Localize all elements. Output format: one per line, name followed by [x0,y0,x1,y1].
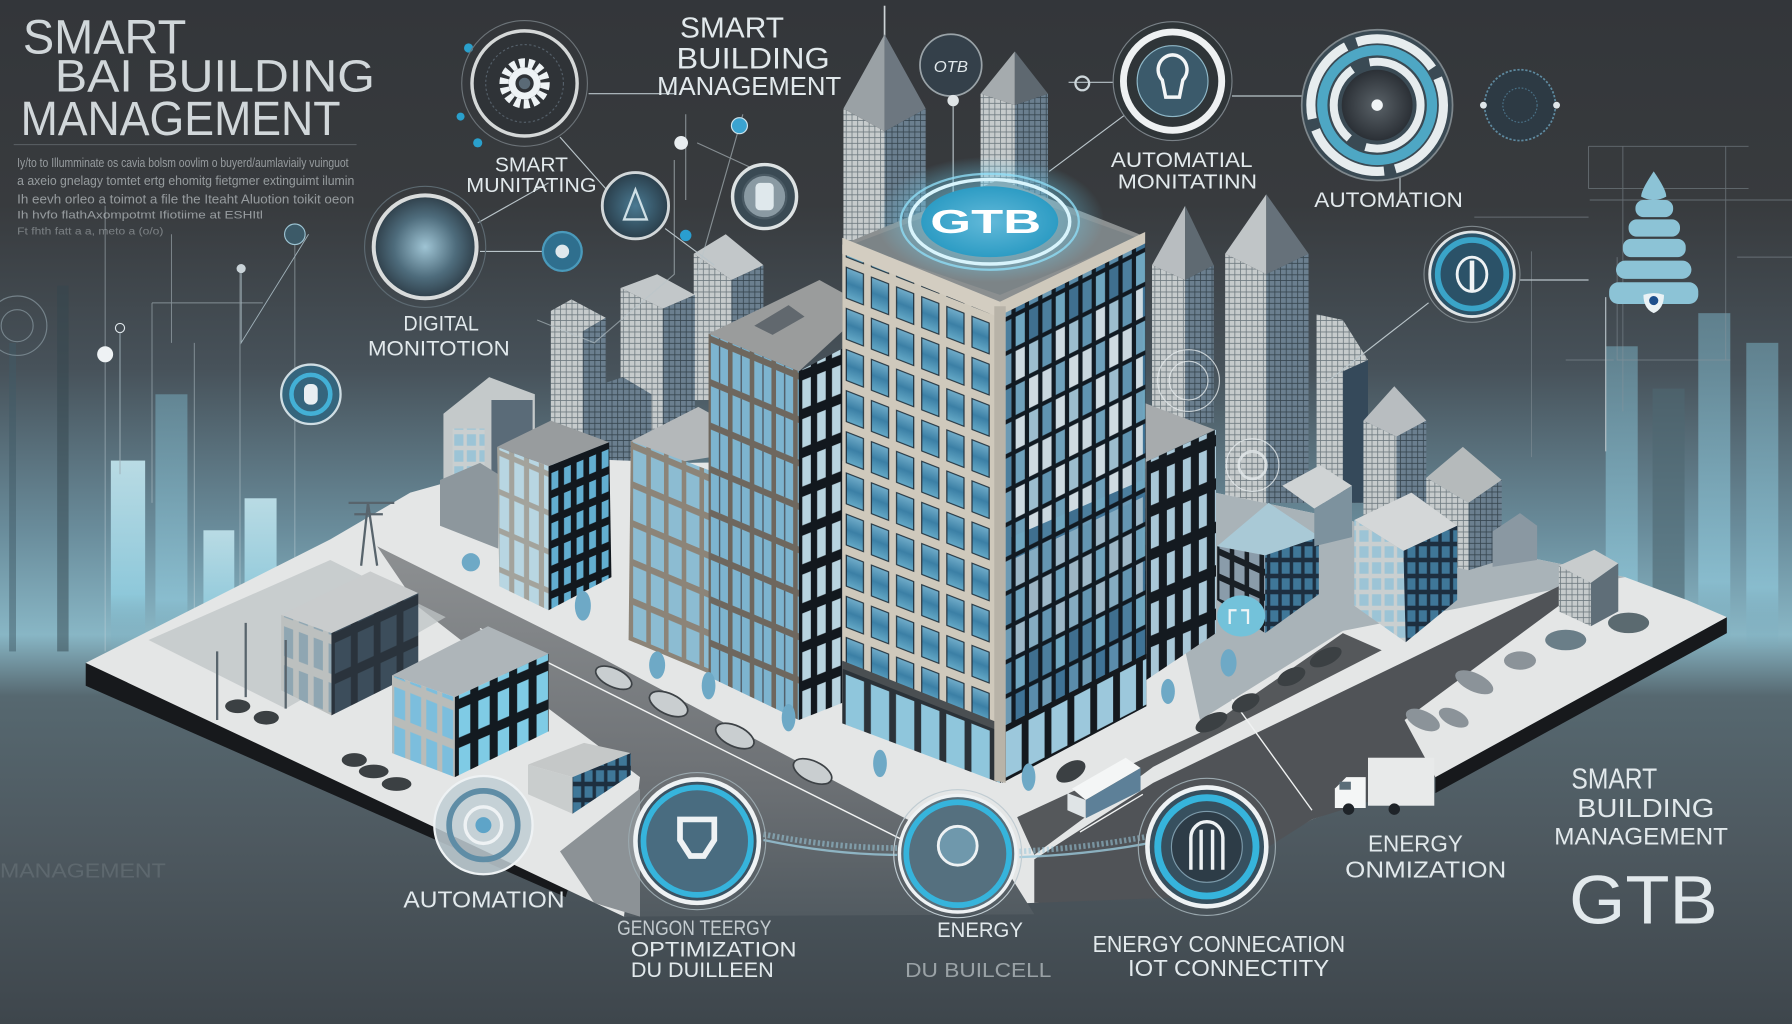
low building: left dark [281,571,418,715]
circle: left edge faint [0,296,47,355]
label: automation top: AUTOMATION [1314,187,1463,212]
platform corner fade [560,789,640,917]
left facade [842,245,1000,783]
label: automatial: AUTOMATIAL [1111,147,1253,172]
label: energy centre: DU BUILCELL [905,959,1051,982]
label: smart building management right: BUILDING [1577,793,1714,823]
title: SMART [23,12,186,65]
circle: automation bottom [434,776,533,874]
label: energy optimization: DU DUILLEEN [631,957,774,982]
GTB right: GTB [1569,861,1718,938]
label: energy connectivity [1093,931,1345,981]
label: smart monitoring: MUNITATING [466,174,597,197]
label: top centre heading: SMART [680,13,784,45]
connector lines [478,82,1606,451]
label: top centre heading: BUILDING [677,43,830,76]
node: small blue [543,232,582,271]
circle: gear [462,21,587,146]
label: smart building management right: MANAGEMENT [1554,824,1728,851]
label: energy connectivity: ENERGY CONNECATION [1093,931,1345,957]
block behind mid building [440,377,535,549]
node: OTB [920,34,982,106]
GTB emblem: GTB [930,204,1041,241]
left bar chart [9,206,309,651]
label: smart building management right [1554,764,1728,851]
label: energy optimization: OPTIMIZATION [631,937,797,962]
circle: mesh sensor [1480,70,1560,141]
label: energy optimization [617,915,797,982]
label: energy optimization right: ENERGY [1368,830,1463,856]
node: rings right of tower [1158,350,1279,491]
background city towers [551,6,1426,537]
circle: energy left [629,773,766,910]
circle: bulb [1113,22,1232,141]
label: energy centre: ENERGY [937,917,1023,942]
right white building [1282,447,1618,642]
faint label bottom-left: MANAGEMENT [0,860,166,883]
label: smart monitoring: SMART [495,153,568,176]
circle: energy centre [894,790,1022,918]
label: energy optimization right [1345,830,1506,883]
road: right street B [1034,586,1559,903]
node: OTB: OTB [934,59,968,76]
right side building [1143,402,1216,680]
GTB emblem [875,157,1104,282]
delivery truck on road [1067,758,1141,818]
garbled body text: Ft fhth fatt a a, meto a (o/o) [17,226,163,237]
small building [528,743,631,814]
circle: digital globe [365,186,486,307]
label: automatial [1111,147,1257,194]
small node dots [457,43,1089,241]
small icon on road [1217,595,1265,637]
node: lower left [281,365,341,424]
title: BAI BUILDING [55,50,375,101]
garbled body text: Ih eevh orleo a toimot a file the Iteaht Aluotion toikit oeon [17,192,354,206]
third tower [629,407,711,674]
label: energy centre [905,917,1051,982]
label: energy optimization right: ONMIZATION [1345,857,1506,883]
label: digital monitoring [368,310,510,360]
right facade [1000,237,1146,783]
label: top centre heading: MANAGEMENT [657,71,841,101]
low building: front blue windows [392,626,549,777]
label: energy connectivity: IOT CONNECTITY [1128,955,1329,981]
garbled body text: a axeio gnelagy tomtet ertg ehomitg fietgmer extinguimt ilumin [17,174,354,188]
title [21,12,375,146]
label: automation bottom: AUTOMATION [403,886,565,912]
road: right street A [1017,633,1382,855]
right bar chart [1474,146,1792,649]
city platform [86,457,1727,917]
connector wave bottom [763,834,1147,857]
node: glowing [733,165,797,229]
garbled body text: Iy/to to Illumminate os cavia bolsm oovlim o buyerd/aumlaviaily vuinguot [17,156,349,170]
label: digital monitoring: MONITOTION [368,335,510,360]
second tower [709,280,842,720]
node: triangle icon [602,173,669,239]
mid building: dark windows [497,421,611,610]
title: MANAGEMENT [21,93,341,146]
truck icon [1335,758,1434,815]
circle: automation dial [1302,30,1453,181]
label: digital monitoring: DIGITAL [403,310,479,335]
circle: blue dial [1424,226,1520,322]
road: left diagonal [377,546,1034,917]
back ground right [1146,469,1625,720]
label: smart building management right: SMART [1571,764,1657,796]
garbled body text [14,144,357,237]
right low building [1217,503,1320,633]
tree icon [1609,171,1698,313]
label: energy optimization: GENGON TEERGY [617,915,771,940]
label: smart monitoring [466,153,597,197]
label: top centre heading [657,13,841,101]
cars and street furniture [217,503,1649,791]
main GTB tower [842,179,1146,783]
roof [842,179,1145,306]
garbled body text: Ih hvfo flathAxompotmt Ifiotiime at ESHItl [17,209,263,221]
circle: connectivity [1138,778,1275,915]
label: automatial: MONITATINN [1118,171,1257,194]
